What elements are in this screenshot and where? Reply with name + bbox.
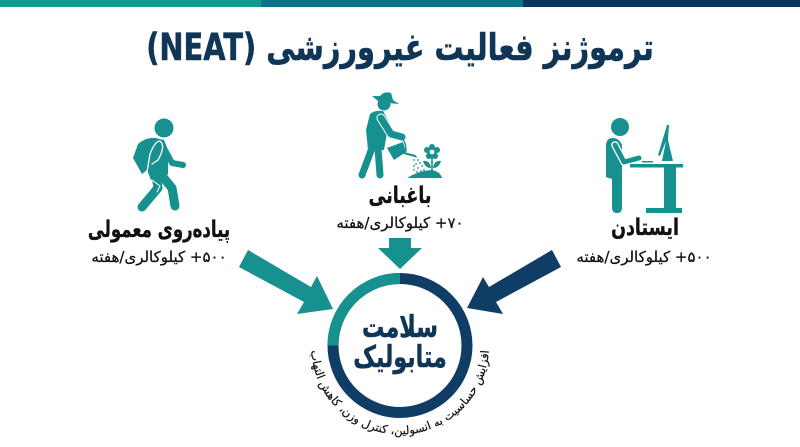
top colour bar	[0, 0, 800, 7]
title: ترموژنز فعالیت غیرورزشی (NEAT)	[146, 25, 654, 70]
value: walking: ۵۰۰+ کیلوکالری/هفته	[91, 248, 227, 266]
label: standing: ایستادن	[611, 214, 679, 241]
label: walking: پیاده‌روی معمولی	[88, 215, 230, 244]
centre label	[353, 311, 447, 375]
value: gardening: ۷۰+ کیلوکالری/هفته	[336, 214, 464, 232]
centre label: متابولیک	[353, 341, 447, 375]
panel: standing	[576, 118, 712, 266]
label: gardening: باغبانی	[369, 182, 431, 209]
icon: gardener with watering can	[362, 92, 442, 178]
curved benefits text: افزایش حساسیت به انسولین، کنترل وزن، کاهش التهاب	[310, 350, 490, 438]
panel: gardening	[336, 92, 464, 232]
icon: walking person with backpack	[133, 118, 183, 207]
arrow: middle	[378, 238, 422, 269]
icon: person standing at desk	[606, 118, 683, 213]
centre label: سلامت	[362, 311, 438, 345]
panel: walking	[88, 118, 230, 266]
value: standing: ۵۰۰+ کیلوکالری/هفته	[576, 248, 712, 266]
arrow: left	[239, 250, 333, 314]
circle: metabolic health	[333, 278, 467, 412]
ring	[333, 278, 467, 412]
arrow: right	[467, 250, 561, 314]
